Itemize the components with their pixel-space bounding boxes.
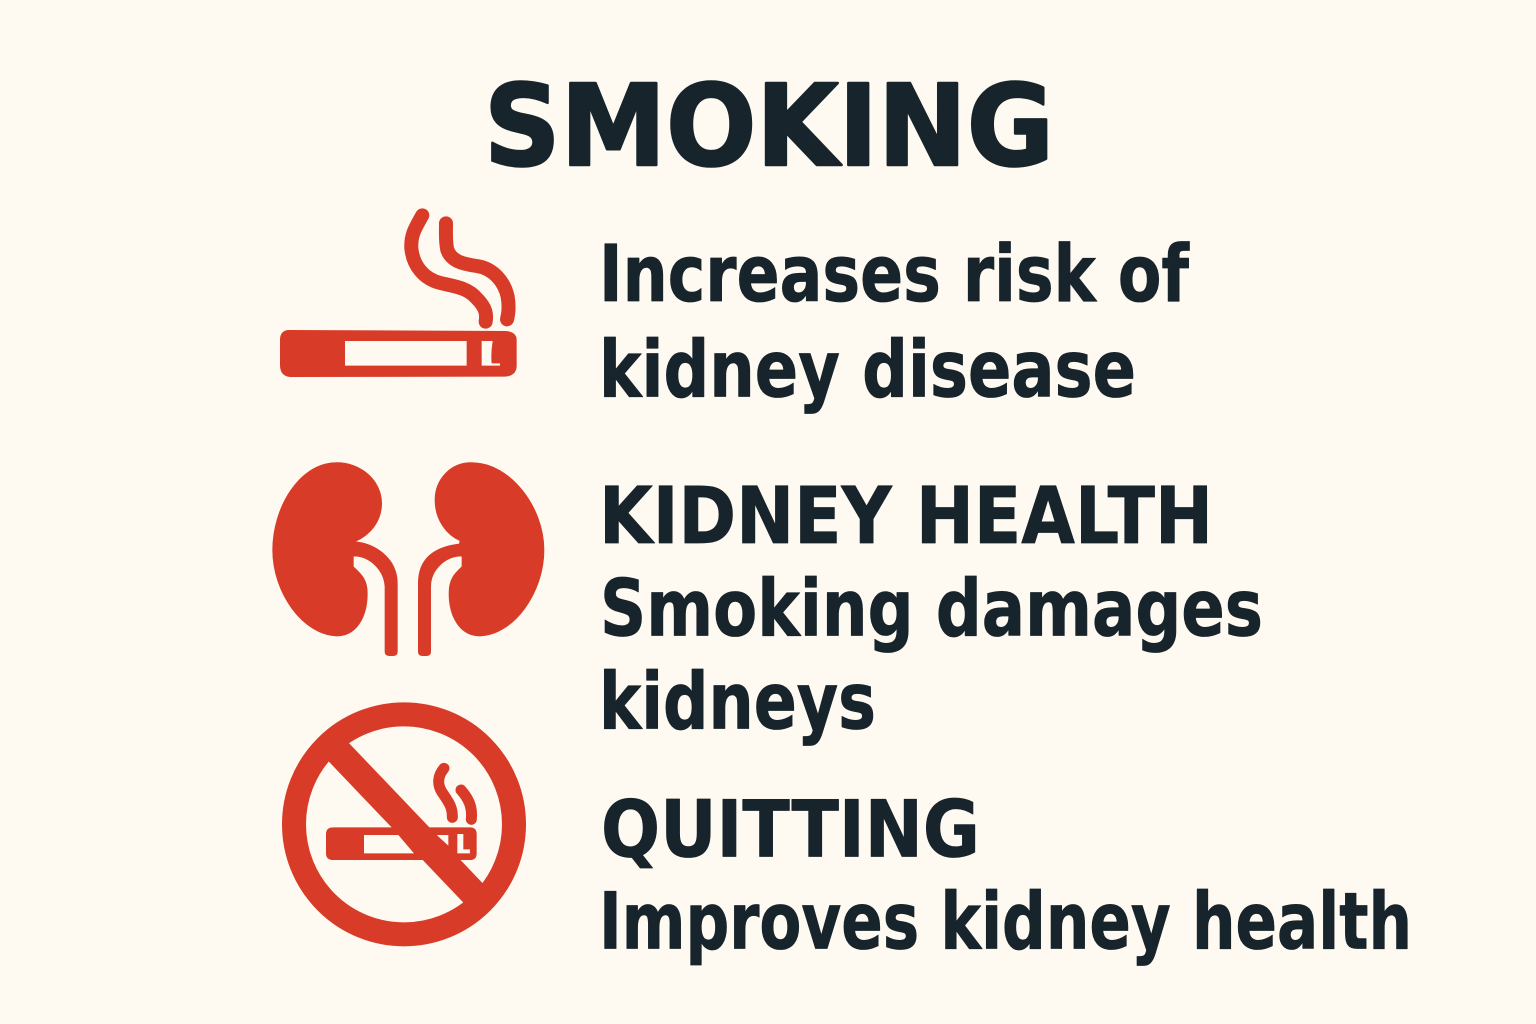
title: SMOKING (484, 62, 1054, 192)
left kidney (273, 463, 397, 656)
icon: no smoking sign (294, 714, 514, 934)
icon: burning cigarette (280, 215, 517, 377)
text: increases risk: kidney disease (599, 326, 1136, 416)
text: increases risk (599, 230, 1190, 416)
right kidney (418, 463, 544, 656)
text: kidney health: Smoking damages (600, 564, 1263, 654)
icon: kidneys (273, 463, 544, 656)
text: kidney health: KIDNEY HEALTH (599, 472, 1213, 562)
text: kidney health: kidneys (599, 658, 876, 748)
text: increases risk: Increases risk of (599, 230, 1190, 320)
text: kidney health (599, 472, 1263, 748)
text: quitting (599, 786, 1412, 968)
text: quitting: QUITTING (601, 786, 980, 876)
